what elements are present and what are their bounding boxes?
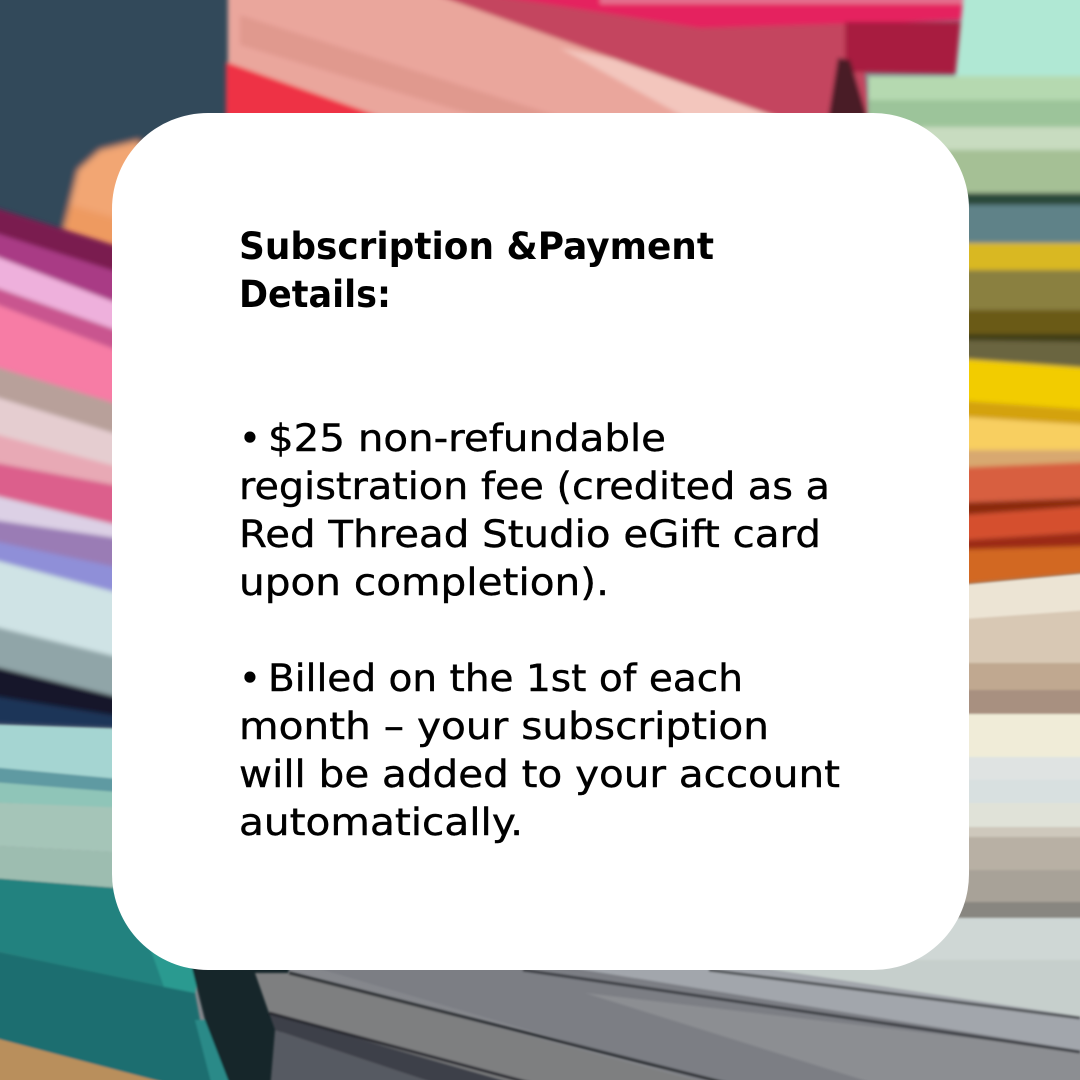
left fabric stack xyxy=(0,203,130,729)
right fabric stack xyxy=(868,0,1080,586)
bottom fabric stack xyxy=(255,960,1080,1080)
text block: monthly billing: • xyxy=(239,657,261,700)
text block: registration fee: upon completion). xyxy=(239,561,609,604)
text block: monthly billing xyxy=(239,657,840,844)
text block: registration fee: $25 non-refundable xyxy=(268,417,666,460)
heading: Details: xyxy=(239,273,391,316)
panel: white rounded card xyxy=(112,113,969,970)
text block: monthly billing: will be added to your account xyxy=(239,753,840,796)
text block: monthly billing: month – your subscription xyxy=(239,705,769,748)
text block: monthly billing: Billed on the 1st of each xyxy=(268,657,743,700)
text block: registration fee: registration fee (credited as a xyxy=(239,465,830,508)
heading: Subscription &Payment xyxy=(239,225,714,268)
heading xyxy=(239,225,714,316)
text block: registration fee xyxy=(239,417,830,604)
top fabric stack xyxy=(226,0,968,120)
text block: monthly billing: automatically. xyxy=(239,801,523,844)
text block: registration fee: • xyxy=(239,417,261,460)
top-left dark wall and orange fabric xyxy=(0,0,232,262)
text block: registration fee: Red Thread Studio eGift card xyxy=(239,513,821,556)
